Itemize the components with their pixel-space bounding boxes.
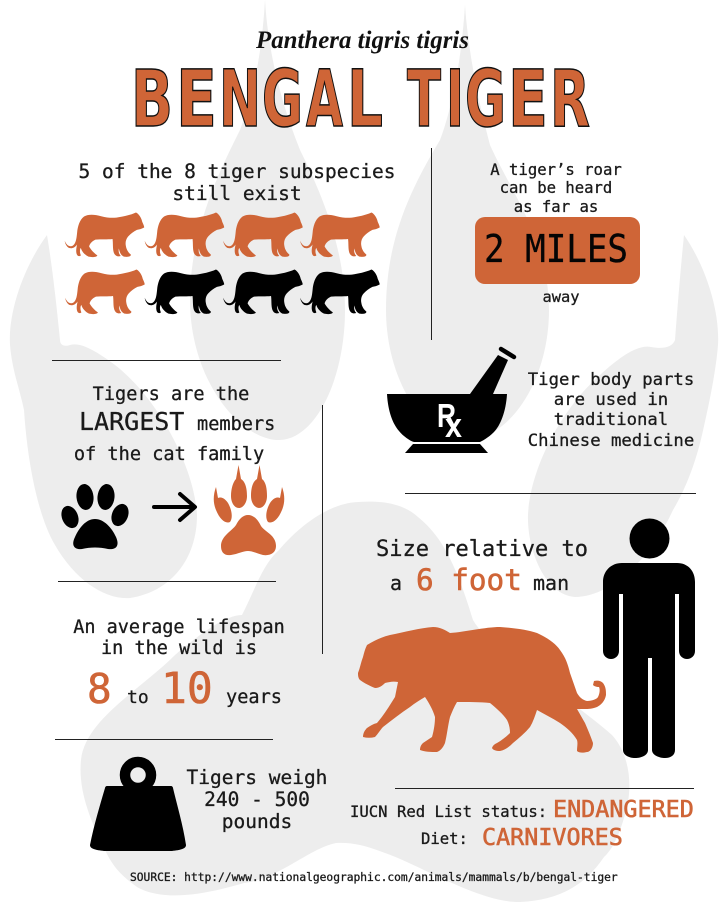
status and diet text: ENDANGERED: [553, 795, 694, 823]
status and diet text: CARNIVORES: [482, 823, 623, 851]
title: E: [508, 55, 548, 145]
roar text: can be heard: [500, 179, 612, 197]
title: L: [347, 55, 383, 145]
subspecies text: 5 of the 8 tiger subspecies: [79, 160, 395, 183]
subspecies tiger icons: [65, 212, 380, 314]
largest text: members: [197, 414, 275, 435]
icon: man: [603, 518, 695, 758]
icon: weight: [90, 762, 186, 851]
size text: [376, 537, 588, 597]
title: E: [176, 55, 217, 145]
callout: 2 miles: [475, 217, 640, 284]
title: G: [262, 55, 303, 145]
source: SOURCE: http://www.nationalgeographic.com/animals/mammals/b/bengal-tiger: [130, 871, 618, 884]
lifespan numbers: years: [226, 687, 282, 708]
subspecies text: still exist: [172, 182, 302, 205]
status and diet text: IUCN Red List status:: [350, 803, 547, 821]
status and diet text: Diet:: [421, 830, 468, 848]
lifespan numbers: 10: [161, 664, 213, 714]
largest text: [74, 384, 275, 465]
lifespan numbers: [87, 664, 282, 714]
title: R: [550, 55, 590, 145]
arrow: [154, 494, 195, 520]
title: [131, 55, 590, 145]
lifespan text: in the wild is: [101, 638, 257, 659]
lifespan numbers: to: [127, 687, 149, 708]
callout: 2 miles: 2 MILES: [484, 227, 628, 271]
icon: mortar and pestle: [387, 349, 514, 453]
lifespan text: An average lifespan: [73, 617, 285, 638]
large tiger silhouette: [358, 627, 606, 753]
title: I: [446, 55, 464, 145]
weight text: [187, 766, 327, 833]
title: T: [407, 55, 441, 145]
title: G: [465, 55, 506, 145]
Rx label: R: [437, 397, 456, 434]
weight text: Tigers weigh: [187, 766, 327, 789]
status and diet text: [350, 795, 694, 851]
title: B: [131, 55, 173, 145]
weight text: pounds: [222, 810, 292, 833]
weight text: 240 - 500: [204, 788, 310, 811]
subtitle: scientific name: Panthera tigris tigris: [255, 27, 469, 54]
size text: man: [533, 571, 569, 595]
subspecies text: [79, 160, 395, 205]
icon: large clawed paw: [214, 465, 284, 555]
largest text: of the cat family: [74, 444, 264, 465]
roar text: as far as: [514, 198, 598, 216]
away text: away: [542, 288, 580, 306]
roar text: [490, 161, 622, 216]
largest text: Tigers are the: [93, 384, 249, 405]
roar text: A tiger’s roar: [490, 161, 622, 179]
medicine text: traditional: [554, 410, 668, 430]
size text: 6 foot: [416, 563, 522, 597]
title: N: [219, 55, 261, 145]
largest text: LARGEST: [79, 407, 184, 436]
icon: small paw: [58, 483, 132, 549]
lifespan numbers: 8: [87, 665, 112, 713]
size text: Size relative to: [376, 537, 588, 562]
medicine text: Chinese medicine: [528, 431, 694, 451]
Rx label: x: [445, 407, 462, 445]
medicine text: Tiger body parts: [528, 370, 694, 390]
medicine text: [528, 370, 694, 451]
divider lines: [52, 148, 696, 788]
medicine text: are used in: [554, 390, 668, 410]
lifespan text: [73, 617, 285, 659]
size text: a: [390, 571, 402, 595]
title: A: [306, 55, 343, 145]
